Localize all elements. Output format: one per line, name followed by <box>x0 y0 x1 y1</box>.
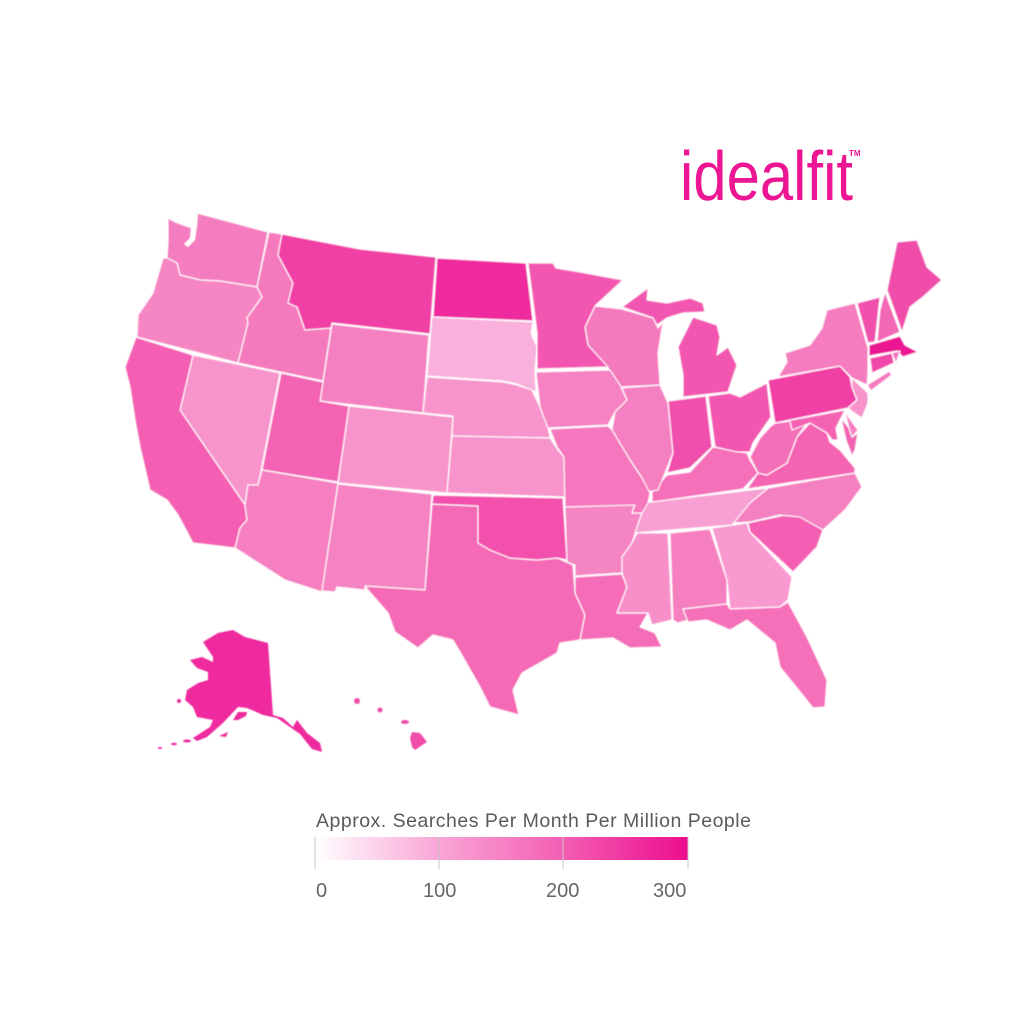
state: Maryland eastern shore <box>841 418 858 456</box>
state: Mississippi <box>617 533 672 625</box>
state: Colorado <box>338 406 453 493</box>
state: Michigan upper <box>622 288 705 325</box>
state: Florida <box>683 602 827 708</box>
state: West Virginia <box>750 421 807 475</box>
state: North Carolina <box>732 473 862 530</box>
state: Idaho <box>238 232 331 381</box>
state: Texas <box>365 504 585 715</box>
state: Delaware <box>845 412 858 437</box>
state: Kentucky <box>652 447 758 502</box>
state: South Carolina <box>748 515 823 572</box>
state: Kansas <box>447 436 565 497</box>
state: New Mexico <box>322 484 432 592</box>
map: Hawaii <box>354 698 427 750</box>
map: Alaska <box>158 630 322 752</box>
state: Nevada <box>180 355 280 505</box>
state: Oregon <box>137 258 262 363</box>
legend title: Approx. Searches Per Month Per Million People <box>316 810 751 832</box>
state: North Dakota <box>433 258 533 321</box>
state: New Hampshire <box>877 292 900 342</box>
legend scale labels: 300 <box>653 880 686 902</box>
state: Rhode Island <box>892 351 900 363</box>
state: Maine <box>887 240 942 332</box>
state: South Dakota <box>427 317 537 392</box>
state: Iowa <box>536 370 627 428</box>
legend scale labels: 200 <box>546 880 579 902</box>
state: Arkansas <box>565 504 642 576</box>
state: Missouri <box>550 426 650 513</box>
state: New Jersey <box>848 378 868 418</box>
state: California <box>125 337 247 548</box>
state: Vermont <box>857 297 880 343</box>
state: Wisconsin <box>585 306 663 387</box>
state: Connecticut <box>870 353 894 373</box>
state: Virginia <box>747 423 855 489</box>
state: Massachusetts <box>869 336 918 357</box>
state: Alabama <box>670 529 727 623</box>
state: Washington <box>167 213 268 287</box>
logo: idealfit: idealfit <box>680 137 853 215</box>
legend scale labels: 100 <box>423 880 456 902</box>
map: contiguous United States <box>125 213 942 715</box>
state: Pennsylvania <box>768 366 857 423</box>
state: Louisiana <box>575 574 662 648</box>
state: New York <box>778 303 868 385</box>
state: Georgia <box>712 523 792 609</box>
state: Indiana <box>667 396 712 473</box>
state: Minnesota <box>528 263 623 369</box>
state: Illinois <box>612 385 673 492</box>
state: Wyoming <box>320 324 429 413</box>
state: Tennessee <box>635 488 768 533</box>
legend <box>315 810 751 902</box>
state: Utah <box>262 373 349 482</box>
state: Oklahoma <box>432 495 567 560</box>
state: Michigan lower <box>678 317 737 397</box>
state: Ohio <box>708 383 771 452</box>
state: Arizona <box>235 470 338 592</box>
state: Nebraska <box>423 377 550 438</box>
legend scale labels: 0 <box>316 880 327 902</box>
state: Maryland <box>775 410 845 440</box>
state: Montana <box>278 234 436 334</box>
logo: idealfit: TM <box>849 149 861 158</box>
legend colour bar <box>315 837 688 860</box>
legend scale labels <box>316 880 686 902</box>
inlet: Puget Sound <box>184 214 198 247</box>
island: Long Island <box>868 372 891 390</box>
